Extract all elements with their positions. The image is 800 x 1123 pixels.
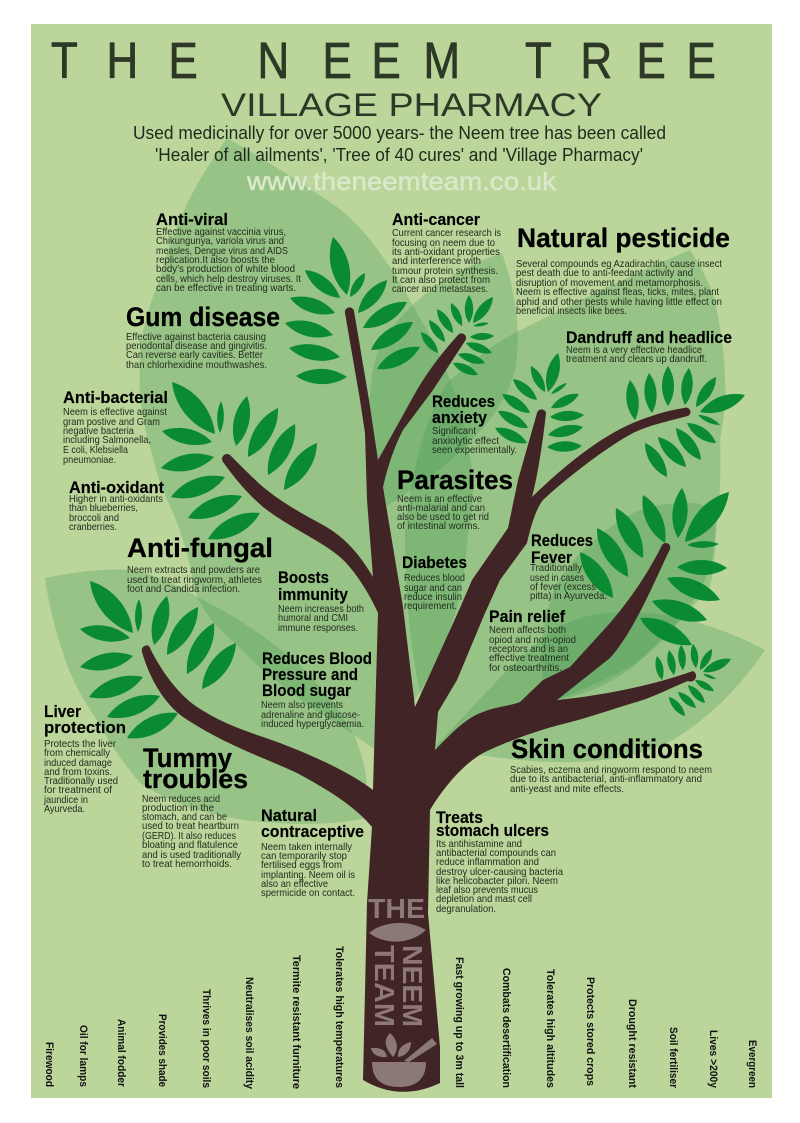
text block: stomach ulcers: destroy ulcer-causing bacteria: [436, 866, 563, 878]
text block: diabetes: reduce insulin: [404, 591, 462, 603]
text block: boosts immunity: immune responses.: [278, 622, 358, 634]
logo word: the: THE: [368, 893, 425, 924]
text block: reduces anxiety: Significant: [432, 425, 476, 437]
text block: reduces anxiety: anxiety: [432, 409, 488, 427]
text block: natural contraceptive: spermicide on contact.: [261, 887, 355, 899]
text block: anti-cancer: and interference with: [392, 255, 481, 267]
text block: tummy troubles: Tummy: [143, 743, 232, 773]
text block: anti-bacterial: E coli, Klebsiella: [63, 444, 128, 456]
text block: tummy troubles: production in the: [142, 802, 214, 814]
text block: skin conditions: [510, 734, 712, 795]
text block: reduces fever: [530, 532, 607, 602]
text block: anti-cancer: It can also protect from: [392, 274, 490, 286]
text block: anti-oxidant: cranberries.: [69, 521, 117, 533]
text block: natural contraceptive: Neem taken internally: [261, 841, 353, 853]
tree trunk and branches: [142, 307, 696, 1092]
text block: reduces fever: Reduces: [531, 532, 593, 550]
text block: natural pesticide: [516, 223, 730, 317]
text block: boosts immunity: immunity: [278, 586, 349, 604]
text block: anti-viral: [156, 211, 301, 294]
text block: anti-cancer: Anti-cancer: [392, 211, 481, 229]
text block: parasites: anti-malarial and can: [397, 502, 485, 514]
leaf cluster: anti-viral branch: [283, 235, 423, 385]
text block: anti-cancer: focusing on neem due to: [392, 237, 495, 249]
text block: gum disease: Can reverse early cavities. Better: [126, 349, 263, 361]
text block: anti-viral: body's production of white blood: [156, 263, 295, 275]
text block: stomach ulcers: Its antihistamine and: [436, 838, 522, 850]
text block: pain relief: receptors and is an: [489, 643, 568, 655]
text block: skin conditions: due to its antibacterial, anti-inflammatory and: [510, 773, 702, 785]
text block: anti-cancer: cancer and metastases.: [392, 283, 488, 295]
title: THE NEEM TREE: [51, 33, 716, 90]
text block: pain relief: Pain relief: [489, 608, 565, 626]
text block: stomach ulcers: stomach ulcers: [436, 822, 549, 840]
text block: liver protection: jaundice in: [43, 794, 88, 806]
vertical list: tree uses and traits: Drought resistant: [626, 999, 638, 1088]
intro text: 'Healer of all ailments', 'Tree of 40 cures' and 'Village Pharmacy': [155, 145, 643, 165]
text block: tummy troubles: bloating and flatulence: [142, 839, 238, 851]
vertical list: tree uses and traits: Lives >200y: [707, 1030, 719, 1089]
text block: natural pesticide: aphid and other pests while having little effect on: [516, 296, 722, 308]
text block: gum disease: periodontal disease and gingivitis.: [126, 340, 267, 352]
text block: natural pesticide: disruption of movement and metamorphosis.: [516, 277, 703, 289]
text block: parasites: also be used to get rid: [397, 511, 489, 523]
text block: gum disease: Effective against bacteria causing: [126, 331, 266, 343]
vertical list: tree uses and traits: Oil for lamps: [77, 1025, 89, 1087]
text block: blood pressure: Reduces Blood: [262, 650, 372, 668]
vertical list: tree uses and traits: Evergreen: [746, 1040, 758, 1088]
text block: gum disease: [126, 302, 280, 371]
text block: blood pressure: Neem also prevents: [261, 699, 343, 711]
text block: anti-oxidant: Anti-oxidant: [69, 479, 164, 497]
text block: pain relief: for osteoarthritis.: [489, 662, 562, 674]
icon: logo leaf: [369, 923, 426, 942]
text block: natural pesticide: Natural pesticide: [517, 223, 730, 253]
text block: tummy troubles: Neem reduces acid: [142, 793, 220, 805]
text block: skin conditions: Scabies, eczema and ringworm respond to neem: [510, 764, 712, 776]
text block: blood pressure: induced hyperglycaemia.: [261, 718, 364, 730]
text block: anti-bacterial: including Salmonella,: [63, 434, 151, 446]
text block: liver protection: Protects the liver: [44, 738, 116, 750]
text block: blood pressure: adrenaline and glucose-: [261, 709, 360, 721]
text block: anti-oxidant: than blueberries,: [69, 502, 138, 514]
text block: natural contraceptive: [261, 807, 364, 899]
text block: anti-viral: Effective against vaccinia virus,: [156, 226, 286, 238]
text block: anti-oxidant: [69, 479, 164, 533]
text block: pain relief: [489, 608, 576, 674]
text block: stomach ulcers: depletion and mast cell: [436, 893, 532, 905]
text block: tummy troubles: used to treat heartburn: [142, 820, 239, 832]
vertical list: tree uses and traits: Soil fertiliser: [667, 1027, 679, 1089]
text block: natural pesticide: beneficial insects like bees.: [516, 305, 627, 317]
vertical list: tree uses and traits: Tolerates high altitudes: [544, 969, 556, 1088]
text block: anti-cancer: tumour protein synthesis.: [392, 265, 498, 277]
text block: reduces anxiety: [432, 393, 517, 456]
icon: mortar and pestle: [371, 1033, 437, 1087]
vertical list: tree uses and traits: Neutralises soil acidity: [243, 977, 255, 1090]
logo word: team: TEAM: [369, 945, 400, 1027]
text block: parasites: of intestinal worms.: [397, 520, 480, 532]
text block: anti-fungal: Anti-fungal: [127, 533, 273, 563]
text block: liver protection: induced damage: [44, 757, 112, 769]
text block: boosts immunity: humoral and CMI: [278, 612, 348, 624]
vertical list: tree uses and traits: Animal fodder: [115, 1019, 127, 1088]
text block: tummy troubles: [142, 743, 248, 870]
text block: natural contraceptive: contraceptive: [261, 823, 364, 841]
text block: anti-bacterial: [63, 389, 168, 466]
text block: reduces fever: of fever (excess: [530, 581, 596, 593]
text block: natural contraceptive: implanting. Neem oil is: [261, 869, 355, 881]
text block: tummy troubles: stomach, and can be: [142, 811, 227, 823]
text block: diabetes: Diabetes: [402, 554, 467, 572]
text block: blood pressure: Blood sugar: [262, 682, 352, 700]
text block: anti-fungal: Neem extracts and powders are: [127, 564, 260, 576]
vertical list: tree uses and traits: Termite resistant furniture: [290, 955, 302, 1089]
text block: parasites: Parasites: [397, 465, 513, 495]
leaf cluster: anxiety branch: [493, 352, 584, 452]
vertical list: tree uses and traits: Fast growing up to 3m tall: [453, 957, 465, 1088]
vertical list: tree uses and traits: Thrives in poor soils: [200, 989, 212, 1088]
text block: natural contraceptive: can temporarily stop: [261, 850, 347, 862]
text block: stomach ulcers: leaf also prevents mucus: [436, 884, 538, 896]
leaf cluster: anti-cancer branch: [418, 294, 497, 379]
leaf cluster: anti-fungal branch: [159, 376, 324, 547]
text block: dandruff and headlice: treatment and clears up dandruff.: [566, 353, 707, 365]
leaf cluster: skin branch: [653, 644, 733, 718]
text block: skin conditions: Skin conditions: [511, 734, 703, 764]
text block: anti-bacterial: gram postive and Gram: [63, 416, 160, 428]
text block: pain relief: effective treatment: [489, 652, 569, 664]
text block: blood pressure: Pressure and: [262, 666, 358, 684]
text block: stomach ulcers: Treats: [436, 809, 483, 827]
logo word: neem: NEEM: [397, 945, 428, 1027]
intro text: Used medicinally for over 5000 years- the Neem tree has been called: [133, 123, 666, 143]
text block: anti-viral: measles, Dengue virus and AIDS: [156, 245, 288, 257]
text block: diabetes: requirement.: [404, 600, 457, 612]
text block: gum disease: Gum disease: [126, 302, 280, 332]
text block: anti-viral: replication.It also boosts the: [156, 254, 275, 266]
vertical list: tree uses and traits: Firewood: [43, 1042, 55, 1087]
text block: anti-cancer: Current cancer research is: [392, 227, 501, 239]
text block: anti-bacterial: pneumoniae.: [63, 454, 116, 466]
text block: dandruff and headlice: Dandruff and headlice: [566, 329, 732, 347]
text block: stomach ulcers: antibacterial compounds can: [436, 847, 556, 859]
text block: diabetes: [402, 554, 467, 612]
intro text: [133, 123, 666, 165]
vertical list: tree uses and traits: Provides shade: [156, 1014, 168, 1087]
text block: tummy troubles: to treat hemorrhoids.: [142, 858, 232, 870]
text block: diabetes: Reduces blood: [404, 572, 465, 584]
vertical list: tree uses and traits: [43, 946, 758, 1090]
text block: anti-viral: can be effective in treating warts.: [156, 282, 296, 294]
text block: anti-viral: Anti-viral: [156, 211, 228, 229]
text block: reduces anxiety: seen experimentally.: [432, 444, 517, 456]
text block: boosts immunity: Boosts: [278, 569, 329, 587]
text block: tummy troubles: (GERD). It also reduces: [142, 830, 236, 842]
text block: reduces anxiety: anxiolytic effect: [432, 435, 499, 447]
text block: natural pesticide: pest death due to anti-feedant activity and: [516, 267, 693, 279]
text block: parasites: [397, 465, 513, 532]
text block: diabetes: sugar and can: [404, 582, 462, 594]
text block: reduces fever: pitta) in Ayurveda.: [530, 590, 607, 602]
text block: liver protection: Traditionally used: [44, 775, 118, 787]
text block: gum disease: than chlorhexidine mouthwashes.: [126, 359, 267, 371]
background big leaves: [45, 138, 765, 824]
text block: anti-viral: cells, which help destroy viruses. It: [156, 273, 301, 285]
text block: anti-oxidant: broccoli and: [69, 512, 119, 524]
text block: tummy troubles: troubles: [143, 764, 248, 794]
text block: blood pressure: [261, 650, 372, 730]
text block: liver protection: Ayurveda.: [44, 803, 85, 815]
text block: anti-fungal: [127, 533, 273, 595]
text block: liver protection: [43, 703, 126, 815]
text block: dandruff and headlice: Neem is a very effective headlice: [566, 344, 702, 356]
text block: anti-cancer: [392, 211, 501, 295]
leaf cluster: dandruff branch: [624, 366, 748, 480]
subtitle: VILLAGE PHARMACY: [221, 87, 602, 123]
text block: anti-bacterial: negative bacteria: [63, 425, 134, 437]
text block: anti-fungal: used to treat ringworm, athletes: [127, 574, 262, 586]
website url: www.theneemteam.co.uk: [246, 168, 557, 196]
text block: parasites: Neem is an effective: [397, 493, 482, 505]
text block: skin conditions: anti-yeast and mite effects.: [510, 783, 624, 795]
text block: stomach ulcers: [436, 809, 563, 915]
text block: reduces fever: Fever: [531, 549, 573, 567]
text block: reduces anxiety: Reduces: [432, 393, 495, 411]
text block: natural contraceptive: also an effective: [261, 878, 328, 890]
text block: stomach ulcers: like helicobacter pilori. Neem: [436, 875, 558, 887]
text block: dandruff and headlice: [566, 329, 732, 365]
text block: liver protection: and from toxins.: [44, 766, 112, 778]
leaf cluster: fever branch: [573, 485, 736, 653]
text block: liver protection: Liver: [44, 703, 82, 721]
vertical list: tree uses and traits: Tolerates high temperatures: [333, 946, 345, 1088]
text block: anti-oxidant: Higher in anti-oxidants: [69, 493, 163, 505]
text block: anti-bacterial: Neem is effective against: [63, 406, 167, 418]
text block: reduces fever: Traditionally: [530, 562, 583, 574]
text block: reduces fever: used in cases: [530, 572, 584, 584]
text block: natural pesticide: Several compounds eg Azadirachtin, cause insect: [516, 258, 722, 270]
text block: natural contraceptive: fertilised eggs from: [261, 859, 342, 871]
text block: anti-bacterial: Anti-bacterial: [63, 389, 168, 407]
vertical list: tree uses and traits: Protects stored crops: [584, 977, 596, 1086]
logo: The Neem Team: [368, 893, 437, 1087]
text block: stomach ulcers: reduce inflammation and: [436, 856, 539, 868]
text block: anti-cancer: its anti-oxidant properties: [392, 246, 500, 258]
text block: boosts immunity: Neem increases both: [278, 603, 364, 615]
text block: natural pesticide: Neem is effective against fleas, ticks, mites, plant: [516, 286, 719, 298]
text block: boosts immunity: [278, 569, 364, 634]
text block: natural contraceptive: Natural: [261, 807, 317, 825]
text block: liver protection: protection: [44, 719, 126, 737]
text block: stomach ulcers: degranulation.: [436, 903, 496, 915]
text block: anti-fungal: foot and Candida infection.: [127, 583, 240, 595]
text block: anti-viral: Chikungunya, variola virus and: [156, 235, 284, 247]
vertical list: tree uses and traits: Combats desertification: [500, 968, 512, 1088]
text block: pain relief: Neem affects both: [489, 624, 566, 636]
text block: liver protection: from chemically: [44, 747, 111, 759]
text block: tummy troubles: and is used traditionally: [142, 849, 242, 861]
text block: pain relief: opiod and non-opiod: [489, 634, 576, 646]
leaf cluster: tummy branch: [78, 575, 243, 746]
text block: liver protection: for treatment of: [44, 784, 112, 796]
